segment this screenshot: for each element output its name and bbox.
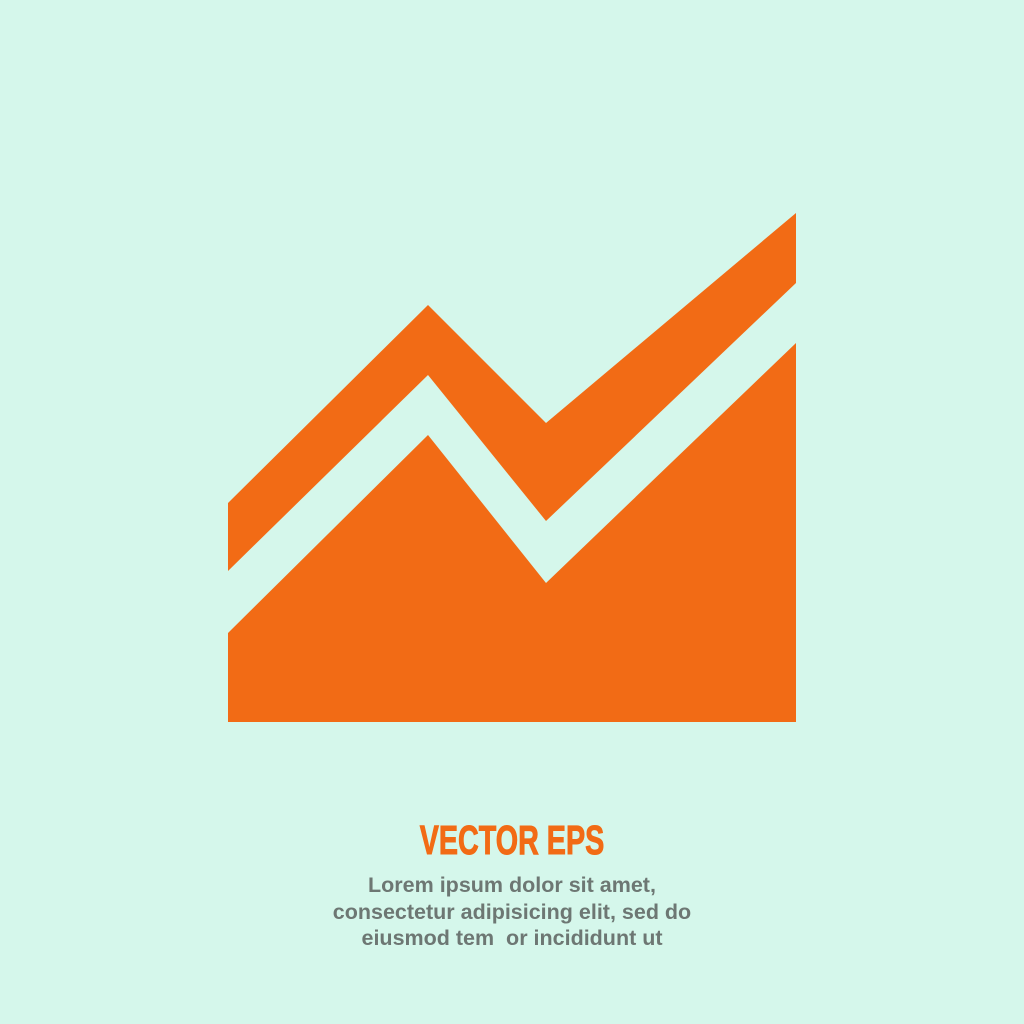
body text: consectetur adipisicing elit, sed do: [333, 900, 691, 924]
lower area: [228, 343, 796, 722]
body text: eiusmod tem or incididunt ut: [362, 926, 662, 950]
title: VECTOR EPS: [420, 817, 604, 863]
body text: [333, 873, 691, 950]
body text: Lorem ipsum dolor sit amet,: [368, 873, 656, 897]
upper line band: [228, 213, 796, 571]
